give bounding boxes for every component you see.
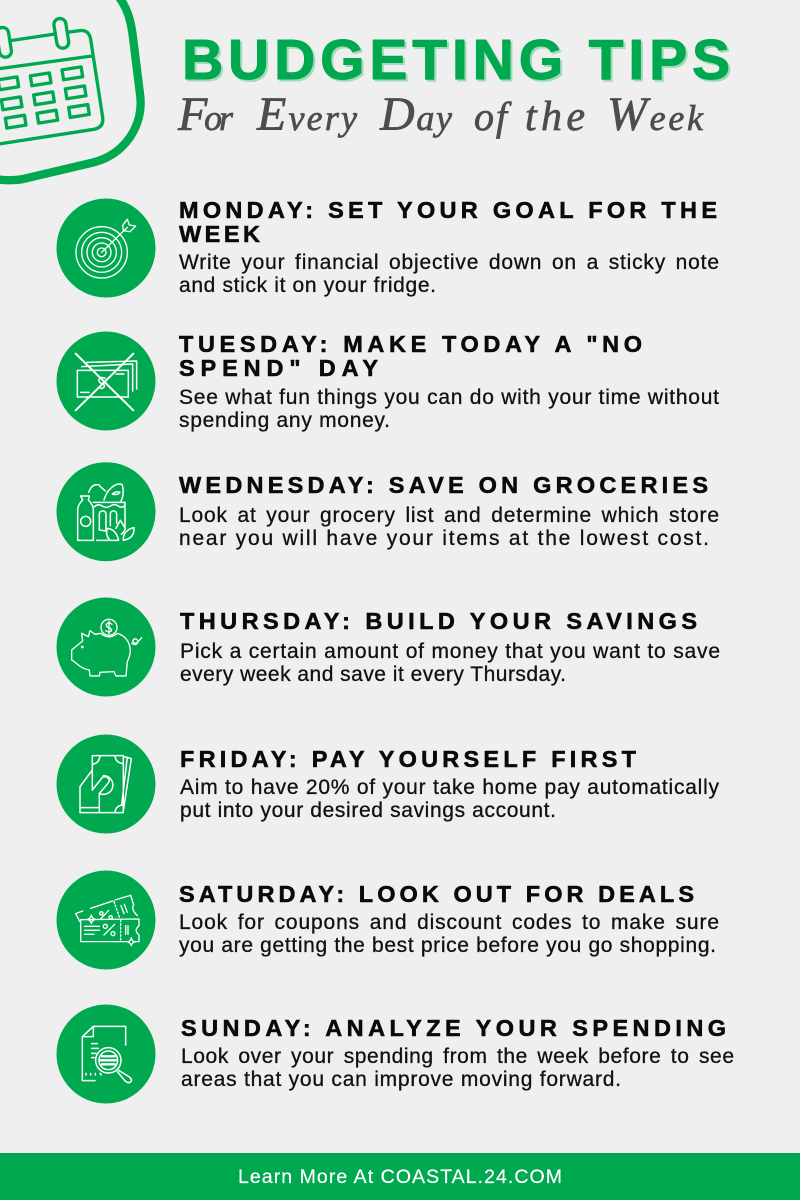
text: Wednesday body [179, 504, 719, 550]
panel: Thursday tip [56, 598, 720, 696]
heading: Friday: FRIDAY: PAY YOURSELF FIRST [180, 746, 637, 772]
text: Tuesday body: See what fun things you can do with your time without [179, 386, 719, 409]
subtitle: of [474, 94, 512, 139]
footer text: Learn More At COASTAL.24.COM [238, 1166, 562, 1188]
icon: groceries [56, 462, 156, 561]
text: Thursday body: every week and save it every Thursday. [180, 663, 566, 686]
text: Wednesday body: near you will have your items at the lowest cost. [179, 527, 709, 550]
icon: calendar in rounded frame [0, 0, 141, 180]
text: Thursday body: Pick a certain amount of money that you want to save [180, 640, 720, 663]
heading: Thursday: THURSDAY: BUILD YOUR SAVINGS [180, 608, 697, 634]
panel: Saturday tip [56, 870, 719, 970]
text: Monday body: and stick it on your fridge. [179, 274, 436, 297]
panel: Sunday tip [56, 1004, 734, 1104]
text: Saturday body: Look for coupons and discount codes to make sure [179, 911, 719, 934]
text: Tuesday body [179, 386, 719, 432]
text: Friday body: put into your desired savings account. [180, 799, 556, 822]
text: Monday body [179, 251, 719, 297]
subtitle: the [525, 94, 585, 140]
icon: target with arrow [56, 198, 156, 298]
text: Tuesday body: spending any money. [179, 409, 390, 432]
text: Friday body [180, 776, 720, 822]
text: Monday body: Write your financial objective down on a sticky note [179, 251, 719, 274]
text: Sunday body: areas that you can improve moving forward. [181, 1068, 621, 1091]
icon: document with magnifying glass [56, 1004, 156, 1104]
text: Wednesday body: Look at your grocery list and determine which store [179, 504, 719, 527]
icon: discount tickets [56, 870, 156, 970]
icon: crossed-out money [56, 332, 156, 430]
subtitle: Day [379, 88, 452, 141]
icon: piggy bank [56, 598, 156, 696]
heading: Sunday: SUNDAY: ANALYZE YOUR SPENDING [181, 1015, 726, 1041]
panel: Tuesday tip [56, 331, 719, 432]
text: Thursday body [180, 640, 720, 686]
subtitle: For [177, 88, 234, 141]
heading: Monday: MONDAY: SET YOUR GOAL FOR THE [179, 197, 717, 223]
heading: Saturday: SATURDAY: LOOK OUT FOR DEALS [179, 881, 694, 907]
heading: Tuesday: TUESDAY: MAKE TODAY A "NO [179, 331, 642, 357]
subtitle: Every [256, 88, 357, 141]
heading: Monday: WEEK [179, 221, 260, 247]
title: BUDGETING TIPS [182, 28, 730, 92]
text: Saturday body: you are getting the best price before you go shopping. [179, 934, 716, 957]
subtitle: Week [607, 88, 704, 141]
heading: Tuesday [179, 331, 642, 381]
text: Sunday body: Look over your spending from the week before to see [181, 1045, 734, 1068]
text: Friday body: Aim to have 20% of your take home pay automatically [180, 776, 720, 799]
heading: Wednesday: WEDNESDAY: SAVE ON GROCERIES [179, 472, 708, 498]
heading: Monday [179, 197, 717, 247]
text: Saturday body [179, 911, 719, 957]
text: Sunday body [181, 1045, 734, 1091]
panel: Monday tip [56, 197, 719, 298]
panel: Wednesday tip [56, 462, 719, 561]
subtitle [177, 88, 704, 141]
heading: Tuesday: SPEND" DAY [179, 355, 378, 381]
panel: Friday tip [56, 734, 720, 834]
footer banner [0, 1153, 800, 1200]
icon: hand holding money [56, 734, 156, 834]
